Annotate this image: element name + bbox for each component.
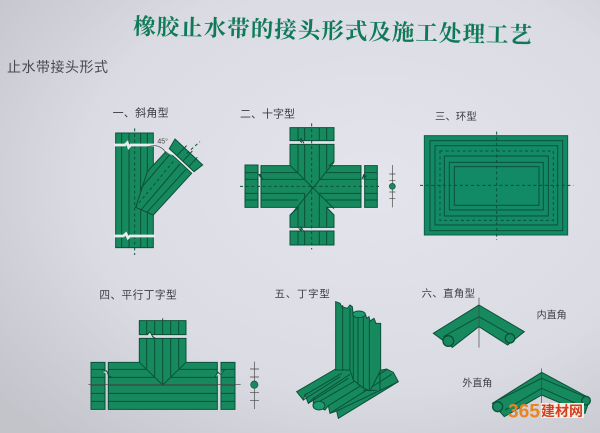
ring rectangle bbox=[420, 132, 573, 240]
watermark: 365 bbox=[508, 402, 540, 422]
label: type 2: 二、十字型 bbox=[240, 106, 295, 120]
diagram 5: T joint 3D bbox=[275, 288, 398, 418]
label: type 5: 五、丁字型 bbox=[275, 288, 330, 301]
watermark: 建材网 bbox=[541, 403, 583, 419]
label: type 6: 六、直角型 bbox=[422, 287, 475, 300]
watermark bbox=[508, 402, 584, 422]
cross-section icon bbox=[389, 165, 395, 207]
diagram 6: right-angle joints bbox=[422, 287, 590, 417]
45 degree mark: 45° bbox=[157, 137, 168, 145]
title: 橡胶止水带的接头形式及施工处理工艺 bbox=[133, 14, 532, 48]
label: type 3: 三、环型 bbox=[435, 110, 477, 123]
floor section bbox=[297, 369, 398, 418]
label: type 4: 四、平行丁字型 bbox=[99, 288, 177, 301]
end caps bbox=[245, 128, 377, 245]
branch end cap bbox=[165, 139, 203, 173]
centre line bbox=[88, 384, 241, 386]
end caps bbox=[91, 318, 235, 409]
diagram 2: cross joint bbox=[240, 106, 395, 249]
T body bbox=[108, 338, 217, 409]
diagram 1: bevel joint bbox=[113, 106, 203, 255]
diagram 4: parallel T joint bbox=[88, 288, 259, 409]
cross body bbox=[261, 144, 361, 227]
label: inner angle: 内直角 bbox=[537, 308, 567, 321]
45 degree mark bbox=[147, 137, 168, 155]
cross-section icon bbox=[250, 362, 259, 409]
vertical section bbox=[336, 302, 381, 391]
label: type 1: 一、斜角型 bbox=[113, 106, 169, 120]
main vertical strip bbox=[114, 128, 155, 255]
diagonal branch bbox=[135, 150, 192, 215]
outer right angle bbox=[492, 368, 590, 417]
label: outer angle: 外直角 bbox=[462, 376, 492, 389]
inner right angle bbox=[433, 298, 524, 348]
subtitle: 止水带接头形式 bbox=[7, 59, 108, 75]
centre lines bbox=[240, 123, 382, 249]
diagram 3: ring joint bbox=[420, 110, 573, 240]
